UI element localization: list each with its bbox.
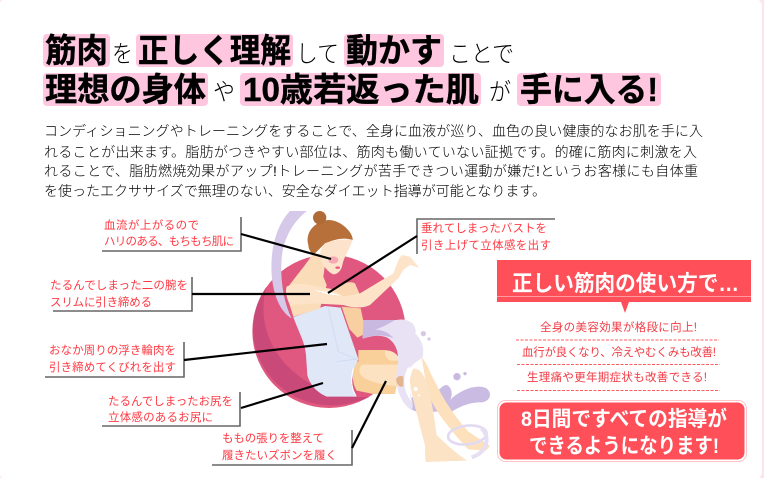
illustration: woman in towel <box>252 211 490 462</box>
callout: waist: おなか周りの浮き輪肉を <box>49 344 176 357</box>
leader lines <box>184 234 417 448</box>
callout: upper arm: スリムに引き締める <box>50 295 152 309</box>
raised arm <box>286 255 419 307</box>
front leg <box>408 369 467 462</box>
purple swoosh behind back <box>271 211 307 318</box>
callout: bust <box>417 219 555 254</box>
body text: を使ったエクササイズで無理のない、安全なダイエット指導が可能となります。 <box>44 183 546 199</box>
purple splash <box>363 320 423 410</box>
callout: bust: 引き上げて立体感を出す <box>421 238 551 252</box>
benefit list: 全身の美容効果が格段に向上! <box>540 320 697 334</box>
callout: upper arm <box>50 277 192 311</box>
heading line 2: 手に入る! <box>520 71 658 108</box>
rear arm <box>342 307 366 338</box>
callout: thighs <box>212 430 352 465</box>
face <box>320 239 353 274</box>
banner <box>497 260 751 313</box>
benefit list: 血行が良くなり、冷えやむくみも改善! <box>522 345 716 359</box>
purple swirl <box>407 331 490 413</box>
back leg <box>422 357 490 451</box>
hand <box>333 282 359 297</box>
heading line 1: を <box>112 41 133 68</box>
callout: skin: 血流が上がるので <box>104 218 199 232</box>
callout: hips: たるんでしまったお尻を <box>108 395 233 408</box>
body text: れることが出来ます。脂肪がつきやすい部位は、筋肉も働いていない証拠です。的確に筋肉に刺激を入 <box>44 144 697 160</box>
heading line 1: 筋肉 <box>45 32 108 69</box>
heading line 1: ことで <box>449 41 514 68</box>
banner: 正しい筋肉の使い方で… <box>512 271 739 296</box>
heading line 2: や <box>213 79 235 106</box>
body and head <box>286 211 419 317</box>
hair bun <box>313 211 326 224</box>
callout: thighs: ももの張りを整えて <box>222 431 324 445</box>
benefit list: 生理痛や更年期症状も改善できる! <box>527 370 707 384</box>
callout: upper arm: たるんでしまった二の腕を <box>50 279 188 292</box>
heading line 1: して <box>296 41 339 68</box>
back and neck <box>287 253 327 317</box>
heading line 2: が <box>489 79 511 106</box>
body text: れることで、脂肪燃焼効果がアップ!トレーニングが苦手できつい運動が嫌だ!というお客様にも自体重 <box>44 163 698 179</box>
heading line 2: 10歳若返った肌 <box>243 71 479 108</box>
call to action <box>498 400 746 462</box>
callout: skin <box>102 217 241 251</box>
title <box>43 32 661 108</box>
call to action: 8日間ですべての指導が <box>521 407 727 431</box>
callout: bust: 垂れてしまったバストを <box>421 222 547 235</box>
heading line 1: 正しく理解 <box>138 32 291 69</box>
callout: thighs: 履きたいズボンを履く <box>222 448 337 462</box>
callout: hips <box>102 392 240 426</box>
callout: skin: ハリのある、もちもち肌に <box>104 235 234 248</box>
hair <box>308 220 353 255</box>
body text: コンディショニングやトレーニングをすることで、全身に血液が巡り、血色の良い健康的なお肌を手に入 <box>44 123 703 139</box>
heading line 2 <box>43 71 661 108</box>
towel <box>293 306 358 397</box>
callout: waist: 引き締めてくびれを出す <box>49 360 176 374</box>
callout: waist <box>45 342 184 377</box>
heading line 2: 理想の身体 <box>45 71 206 108</box>
lips <box>335 266 340 269</box>
heading line 1 <box>43 32 514 69</box>
pink circle <box>252 255 406 408</box>
thighs <box>353 350 402 394</box>
armpit highlight <box>313 290 342 296</box>
heading line 1: 動かす <box>346 32 442 69</box>
callout: hips: 立体感のあるお尻に <box>108 410 213 424</box>
rear leg and swirl <box>407 331 490 462</box>
body text <box>44 123 703 199</box>
benefit list <box>516 320 720 390</box>
call to action: できるようになります! <box>529 435 719 458</box>
ankle loop <box>447 424 488 457</box>
cheek <box>328 256 338 264</box>
